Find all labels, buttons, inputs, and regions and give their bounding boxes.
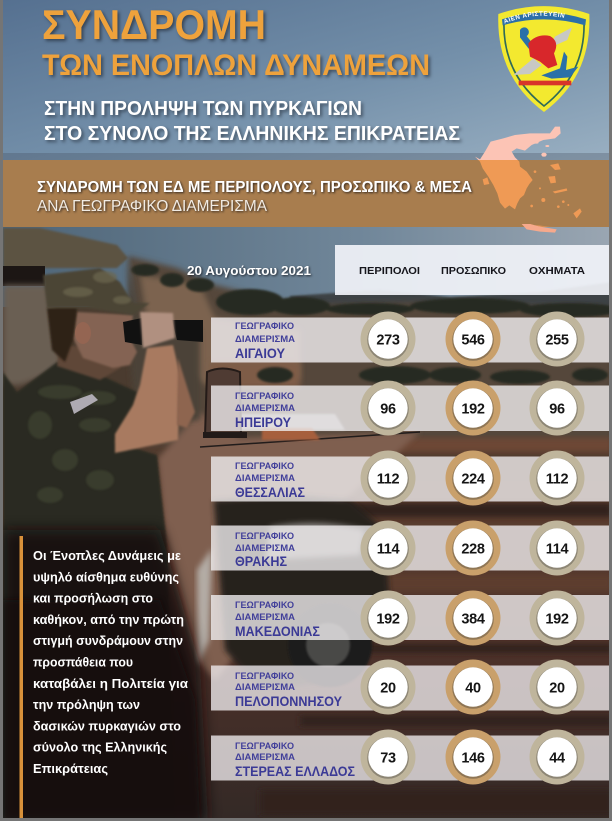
near hillside — [128, 256, 612, 445]
vehicle — [158, 412, 420, 680]
distant ridge — [290, 282, 612, 330]
title: ΣΥΝΔΡΟΜΗ — [42, 1, 266, 48]
callout text: υψηλό αίσθημα ευθύνης — [33, 570, 179, 584]
title — [42, 1, 430, 82]
subtitle: ΣΤΗΝ ΠΡΟΛΗΨΗ ΤΩΝ ΠΥΡΚΑΓΙΩΝ — [44, 98, 362, 120]
row: Μακεδονίας: ΜΑΚΕΔΟΝΙΑΣ — [235, 624, 320, 639]
row: Ηπείρου: 96 — [549, 402, 565, 418]
soldier neck and head — [57, 345, 120, 380]
row: Θεσσαλίας: ΓΕΩΓΡΑΦΙΚΟ — [235, 461, 294, 472]
row: Ηπείρου: ΔΙΑΜΕΡΙΣΜΑ — [235, 403, 295, 414]
subtitle: ΣΤΟ ΣΥΝΟΛΟ ΤΗΣ ΕΛΛΗΝΙΚΗΣ ΕΠΙΚΡΑΤΕΙΑΣ — [44, 123, 460, 145]
callout accent bar — [20, 536, 23, 818]
row: Θεσσαλίας: ΔΙΑΜΕΡΙΣΜΑ — [235, 473, 295, 484]
row: Πελοποννήσου: ΔΙΑΜΕΡΙΣΜΑ — [235, 682, 295, 693]
row: Θεσσαλίας: 112 — [377, 472, 399, 488]
row: Θράκης: ΘΡΑΚΗΣ — [235, 554, 287, 569]
header sky background — [0, 0, 612, 160]
date: 20 Αυγούστου 2021 — [187, 264, 311, 278]
row: Αιγαίου: ΑΙΓΑΙΟΥ — [235, 346, 285, 361]
row: Στερεάς Ελλάδος: ΣΤΕΡΕΑΣ ΕΛΛΑΔΟΣ — [235, 764, 355, 779]
row: Αιγαίου: ΔΙΑΜΕΡΙΣΜΑ — [235, 334, 295, 345]
callout text: δασικών πυρκαγιών στο — [33, 719, 181, 733]
row: Μακεδονίας — [211, 590, 609, 646]
row: Θράκης: 114 — [546, 542, 568, 558]
callout text: και προσήλωση στο — [33, 592, 153, 606]
row: Μακεδονίας: ΔΙΑΜΕΡΙΣΜΑ — [235, 612, 295, 623]
row: Στερεάς Ελλάδος — [211, 730, 609, 784]
band heading: ΣΥΝΔΡΟΜΗ ΤΩΝ ΕΔ ΜΕ ΠΕΡΙΠΟΛΟΥΣ, ΠΡΟΣΩΠΙΚΟ & ΜΕΣΑ — [37, 179, 472, 196]
callout text: προσπάθεια που — [33, 656, 133, 670]
table header: ΠΕΡΙΠΟΛΟΙ — [359, 265, 420, 277]
row: Μακεδονίας: ΓΕΩΓΡΑΦΙΚΟ — [235, 600, 294, 611]
callout text: καθήκον, από την πρώτη — [33, 613, 184, 627]
row: Θράκης — [211, 520, 609, 576]
row: Μακεδονίας: 192 — [376, 612, 400, 628]
shadow above band — [0, 153, 612, 160]
row: Πελοποννήσου — [211, 660, 609, 714]
row: Θράκης: ΓΕΩΓΡΑΦΙΚΟ — [235, 531, 294, 542]
callout text: την πρόληψη των — [33, 698, 140, 712]
row: Ηπείρου: 96 — [380, 402, 396, 418]
table header — [335, 245, 609, 295]
row: Στερεάς Ελλάδος: ΓΕΩΓΡΑΦΙΚΟ — [235, 741, 294, 752]
callout text: καταβάλει η Πολιτεία για — [33, 677, 188, 691]
shrubs — [131, 264, 612, 384]
tent and left hillside — [3, 228, 128, 268]
row: Ηπείρου — [211, 380, 609, 436]
row: Αιγαίου — [211, 312, 609, 366]
icon: armed forces shield: ΑΙΕΝ ΑΡΙΣΤΕΥΕΙΝ — [504, 11, 565, 24]
photo: soldier with binoculars beside a vehicle — [0, 227, 612, 821]
row: Ηπείρου: ΓΕΩΓΡΑΦΙΚΟ — [235, 391, 294, 402]
row: Θεσσαλίας — [211, 450, 609, 506]
cap — [43, 268, 150, 315]
soldier torso — [3, 362, 175, 821]
orange band — [0, 160, 612, 227]
binoculars — [123, 318, 203, 345]
title: ΤΩΝ ΕΝΟΠΛΩΝ ΔΥΝΑΜΕΩΝ — [42, 49, 430, 82]
row: Αιγαίου: ΓΕΩΓΡΑΦΙΚΟ — [235, 321, 294, 332]
row: Θράκης: 228 — [461, 542, 485, 558]
wing mirror — [203, 368, 247, 438]
subtitle — [44, 98, 460, 145]
callout text: Οι Ένοπλες Δυνάμεις με — [33, 549, 181, 563]
dirt track stripes — [330, 438, 612, 452]
callout text: στιγμή συνδράμουν στην — [33, 634, 183, 648]
row: Θράκης: 114 — [377, 542, 399, 558]
row: Αιγαίου: 255 — [545, 332, 569, 348]
row: Πελοποννήσου: ΠΕΛΟΠΟΝΝΗΣΟΥ — [235, 694, 342, 709]
dark lower-left fade — [3, 530, 208, 821]
row: Μακεδονίας: 192 — [545, 612, 569, 628]
row: Θράκης: ΔΙΑΜΕΡΙΣΜΑ — [235, 543, 295, 554]
callout text: Επικράτειας — [33, 762, 108, 776]
icon: armed forces shield — [498, 6, 590, 112]
row: Αιγαίου: 546 — [461, 332, 485, 348]
row: Μακεδονίας: 384 — [461, 612, 485, 628]
row: Πελοποννήσου: ΓΕΩΓΡΑΦΙΚΟ — [235, 671, 294, 682]
row: Ηπείρου: 192 — [461, 402, 485, 418]
row: Θεσσαλίας: ΘΕΣΣΑΛΙΑΣ — [235, 485, 305, 500]
row: Στερεάς Ελλάδος: 44 — [549, 750, 565, 766]
map of Greece — [475, 127, 582, 233]
row: Θεσσαλίας: 224 — [461, 472, 485, 488]
row: Στερεάς Ελλάδος: ΔΙΑΜΕΡΙΣΜΑ — [235, 752, 295, 763]
row: Στερεάς Ελλάδος: 73 — [380, 750, 396, 766]
row: Πελοποννήσου: 20 — [380, 680, 396, 696]
row: Ηπείρου: ΗΠΕΙΡΟΥ — [235, 415, 291, 430]
callout text: σύνολο της Ελληνικής — [33, 741, 167, 755]
row: Πελοποννήσου: 40 — [465, 680, 481, 696]
row: Πελοποννήσου: 20 — [549, 680, 565, 696]
band heading: ΑΝΑ ΓΕΩΓΡΑΦΙΚΟ ΔΙΑΜΕΡΙΣΜΑ — [37, 198, 268, 215]
row: Στερεάς Ελλάδος: 146 — [461, 750, 485, 766]
arms and hand — [115, 345, 180, 453]
table header: ΠΡΟΣΩΠΙΚΟ — [441, 265, 506, 277]
row: Θεσσαλίας: 112 — [546, 472, 568, 488]
table header: ΟΧΗΜΑΤΑ — [529, 265, 585, 277]
row: Αιγαίου: 273 — [376, 332, 400, 348]
callout text — [33, 549, 188, 776]
band heading — [37, 179, 472, 215]
